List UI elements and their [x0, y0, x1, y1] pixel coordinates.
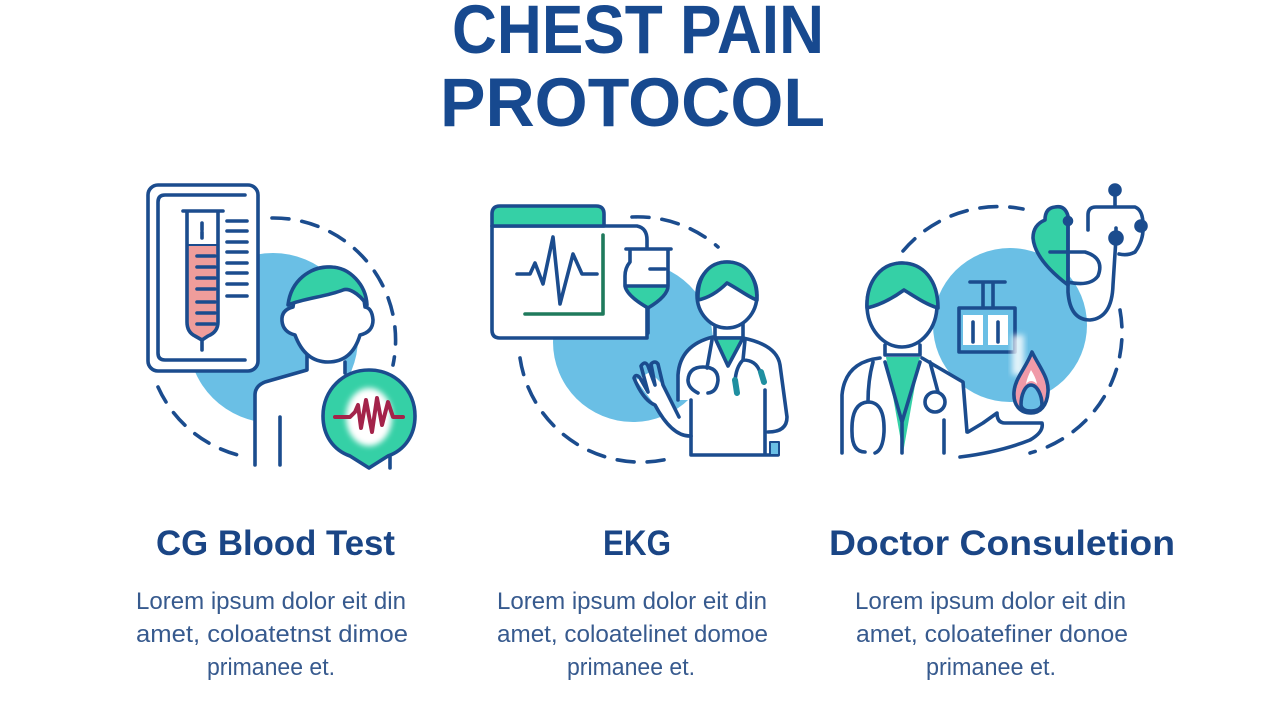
text: EKG description: amet, coloatelinet domoe — [497, 621, 768, 648]
title: PROTOCOL — [440, 64, 825, 141]
text: doctor consultation description: Lorem ipsum dolor eit din — [855, 588, 1126, 615]
panel: doctor consultation — [829, 185, 1175, 681]
text: doctor consultation description: primanee et. — [926, 654, 1056, 681]
text: EKG description — [497, 588, 768, 681]
heading: doctor consultation: Doctor Consuletion — [829, 524, 1175, 563]
text: blood test description: primanee et. — [207, 654, 335, 681]
panel: blood test — [136, 185, 415, 681]
icon: blood test illustration — [148, 185, 415, 470]
text: doctor consultation description: amet, coloatefiner donoe — [856, 621, 1128, 648]
heading: EKG: EKG — [603, 524, 671, 563]
text: EKG description: Lorem ipsum dolor eit din — [497, 588, 767, 615]
panel: EKG — [492, 206, 787, 681]
icon: EKG illustration — [492, 206, 787, 462]
text: blood test description — [136, 588, 408, 681]
text: doctor consultation description — [855, 588, 1128, 681]
text: EKG description: primanee et. — [567, 654, 695, 681]
heading: blood test: CG Blood Test — [156, 524, 395, 563]
title — [440, 0, 825, 141]
icon: doctor consultation illustration — [842, 185, 1146, 457]
text: blood test description: amet, coloatetnst dimoe — [136, 621, 408, 648]
text: blood test description: Lorem ipsum dolor eit din — [136, 588, 406, 615]
